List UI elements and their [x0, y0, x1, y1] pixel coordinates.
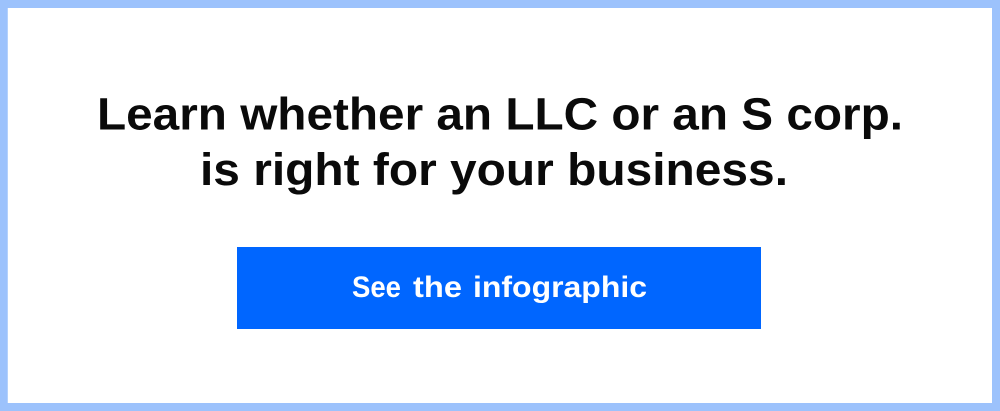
button: see the infographic: infographic — [473, 271, 647, 304]
button: see the infographic: the — [413, 271, 462, 304]
heading: title: Learn whether an LLC or an S corp. — [97, 88, 903, 140]
heading: title — [97, 88, 903, 195]
heading: title: is right for your business. — [200, 144, 788, 195]
button: see the infographic: See — [352, 271, 401, 304]
button: see the infographic — [237, 247, 761, 329]
